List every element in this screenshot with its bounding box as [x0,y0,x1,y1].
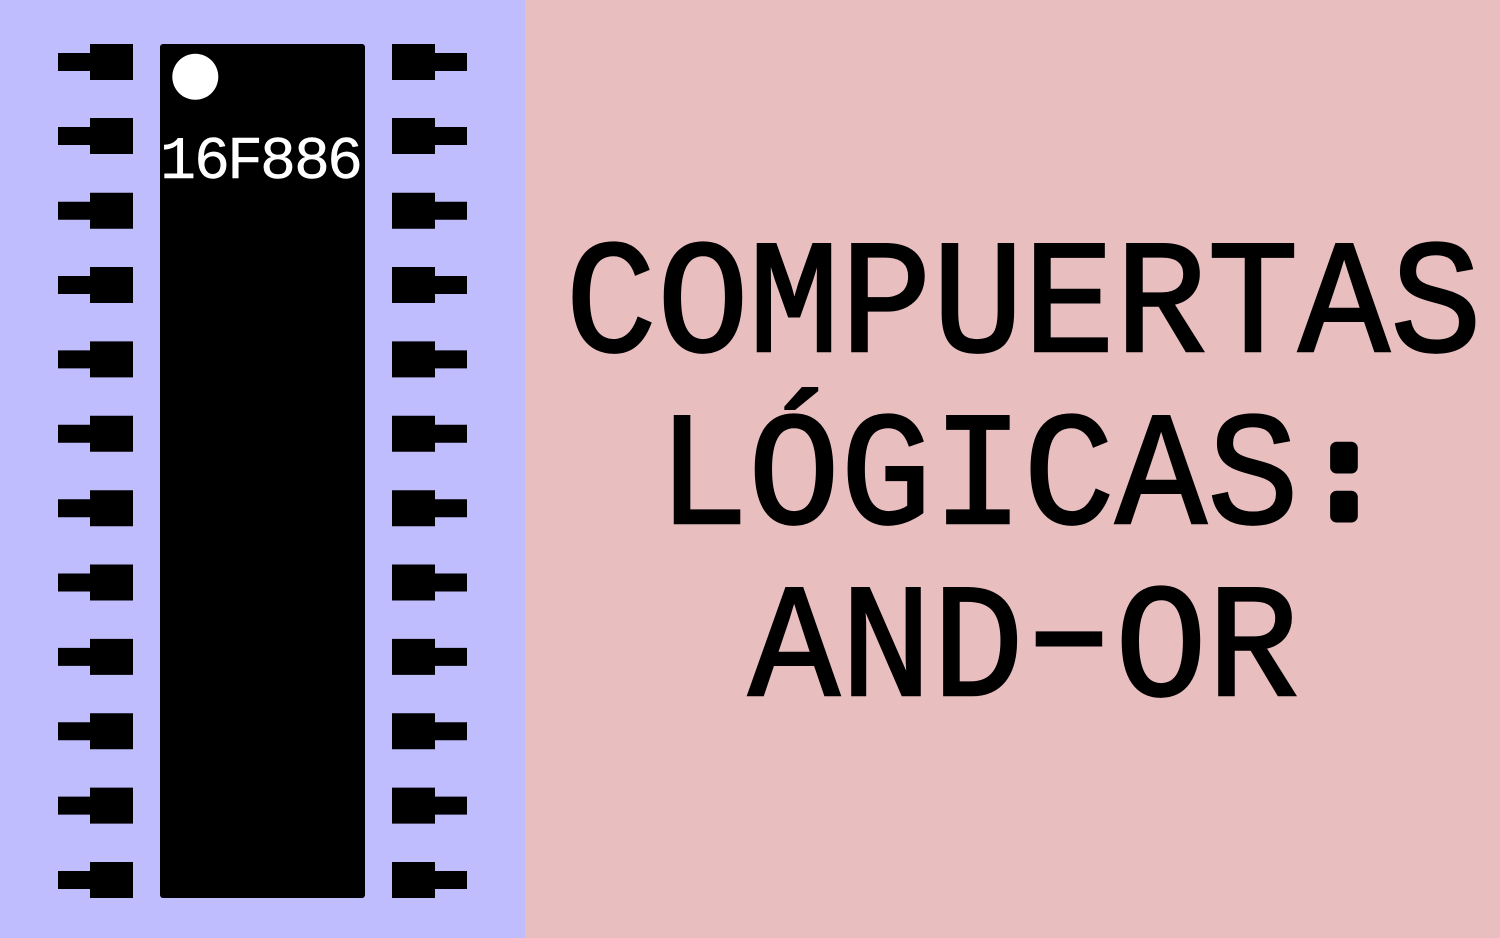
panel: title background [525,0,1500,938]
integrated circuit chip [58,44,467,898]
title line 3: AND [748,561,1024,744]
title line 2: LÓGICAS [657,388,1299,572]
right pins [392,44,467,898]
chip label: 16F886 [160,129,363,197]
title line 2: : [1306,410,1382,555]
left pins [58,44,133,898]
title line 1: COMPUERTAS [565,217,1482,400]
title line 3: OR [1115,561,1299,744]
title [565,217,1482,744]
title line 3: - [1000,547,1138,731]
chip body [160,44,365,898]
icon: pin one marker [172,54,218,100]
title line 3 [748,547,1299,744]
panel: chip background [0,0,525,938]
